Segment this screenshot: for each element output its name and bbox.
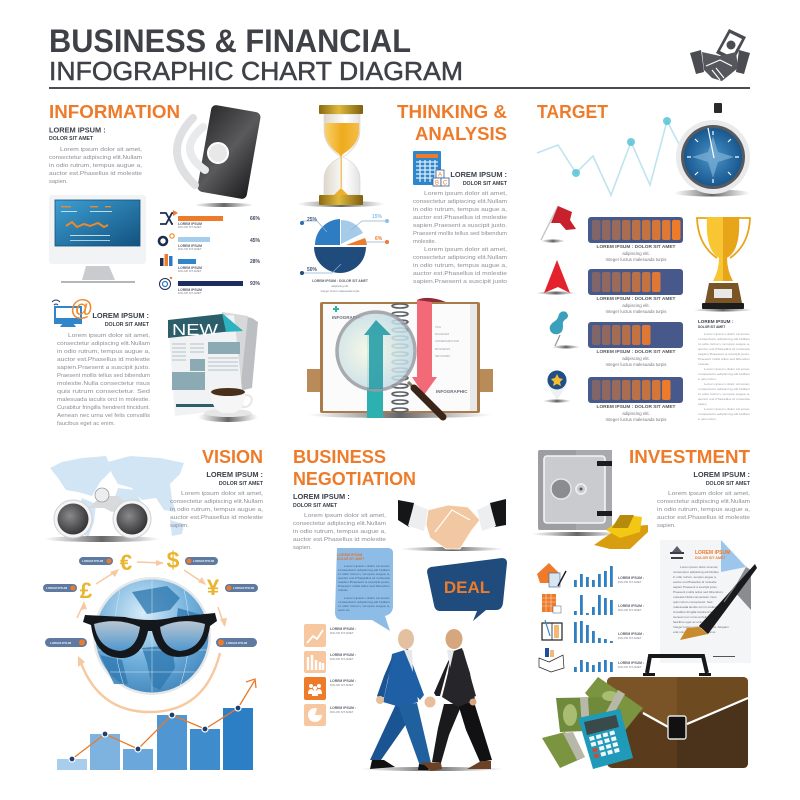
- money stacks: [542, 677, 643, 768]
- text block: information intro: DOLOR SIT AMET: [49, 136, 94, 142]
- callout: blue speech bubble: Lorem ipsum dolor sit amet,: [344, 564, 390, 568]
- icon: spiral notebook with arrows and magnifier: NETWORK: [435, 354, 450, 358]
- icon: blue push pin: [550, 311, 580, 348]
- text block: investment: consectetur adipiscing elit.Nullam: [657, 499, 750, 505]
- text block: information intro: Lorem ipsum dolor sit amet,: [60, 147, 142, 153]
- text block: information details: Aenean nec urna vel felis convallis: [57, 413, 150, 419]
- icon: spiral notebook with arrows and magnifier: INFOGRAPHIC: [436, 389, 468, 394]
- icon: briefcase with money and calculator: [542, 656, 748, 769]
- text block: vision: LOREM IPSUM :: [206, 470, 263, 479]
- callout: blue speech bubble: consectetur adipiscing elit.Nullam: [338, 568, 390, 572]
- icon: bar tile: [304, 651, 326, 673]
- heading: vision: VISION: [202, 446, 263, 467]
- text block: information details: molestie.Nulla consectetur risus: [57, 381, 150, 387]
- title: [49, 23, 463, 86]
- chart: percentage bars: LOREM IPSUM: [178, 222, 202, 226]
- text block: target: sapien.Praesent a suscipit justo.: [698, 352, 750, 356]
- row 1 mini bars: [574, 566, 613, 587]
- text block: thinking and analysis: sapien.Praesent a suscipit justo.: [413, 223, 507, 229]
- icon: document with fountain pen: Aenean nec urna vel felis convallis: [673, 615, 721, 619]
- icon: orange calculator: [542, 594, 561, 613]
- chart: mini bar rows with icons: LOREM IPSUM :: [618, 661, 644, 665]
- text block: target: Lorem ipsum dolor sit amet,: [704, 407, 750, 411]
- chart: pie chart: 15%: [372, 214, 383, 220]
- pill labels: LOREM IPSUM: [193, 559, 215, 563]
- progress bar: 7 of 9: adipiscing elit.: [622, 303, 650, 308]
- icon: gold trophy: [693, 217, 753, 312]
- text block: thinking and analysis: in odio rutrum, tempus augue a,: [413, 263, 507, 269]
- callout: blue speech bubble: DOLOR SIT AMET: [337, 557, 364, 561]
- progress bar: 7 of 9: [588, 269, 683, 314]
- text block: thinking and analysis: in odio rutrum, tempus augue a,: [413, 207, 507, 213]
- text block: information details: quis rutrum consectetur. Sed: [57, 389, 150, 395]
- icon: document with fountain pen: molestie.Nulla consectetur risus: [673, 595, 717, 599]
- panel: business negotiation: [293, 446, 507, 771]
- icon: map marker with star: [543, 370, 571, 402]
- text block: investment: [657, 470, 751, 529]
- title: BUSINESS & FINANCIAL: [49, 23, 411, 59]
- icon: smartphone with signal waves: [177, 104, 261, 207]
- callout: blue speech bubble: in odio rutrum, tempus augue a,: [338, 572, 390, 576]
- text block: information details: Lorem ipsum dolor sit amet,: [68, 333, 150, 339]
- icon: document with fountain pen: consectetur adipiscing elit.Nullam: [673, 570, 719, 574]
- panel: thinking and analysis: [297, 101, 508, 418]
- icon: document with fountain pen: quis rutrum consectetur. Sed: [673, 600, 713, 604]
- callout: blue speech bubble: [335, 548, 393, 631]
- text block: target: auctor est.Phasellus id molestie: [698, 397, 750, 401]
- text block: information details: malesuada iaculis orci in molestie.: [57, 397, 150, 403]
- text block: target: Lorem ipsum dolor sit amet,: [704, 367, 750, 371]
- text block: investment: sapien.: [657, 523, 676, 529]
- text block: business negotiation: DOLOR SIT AMET: [293, 503, 338, 509]
- text block: target: Lorem ipsum dolor sit amet,: [704, 382, 750, 386]
- icon: red arrowhead: [536, 260, 576, 294]
- text block: vision: Lorem ipsum dolor sit amet,: [181, 491, 263, 497]
- text block: target: in odio rutrum,: [698, 417, 717, 421]
- text block: target: in odio rutrum, tempus augue a,: [698, 392, 750, 396]
- icon: newspaper and coffee cup: [168, 312, 258, 422]
- text block: business negotiation: sapien.: [293, 545, 312, 551]
- chart: percentage bars: DOLOR SIT AMET: [178, 269, 202, 273]
- chart: percentage bars: DOLOR SIT AMET: [178, 291, 202, 295]
- text block: target: sapien.: [698, 402, 708, 406]
- text block: business negotiation: in odio rutrum, tempus augue a,: [293, 529, 386, 535]
- progress bar: 7 of 9: Integer luctus malesuada turpis: [605, 309, 667, 314]
- text block: information details: auctor est.Phasellus id molestie: [57, 357, 150, 363]
- text block: target: [698, 319, 751, 421]
- text block: information details: [57, 311, 150, 427]
- pill labels: LOREM IPSUM: [233, 586, 255, 590]
- arrows: orange cycle: [77, 560, 227, 712]
- chart: mini bar rows with icons: DOLOR SIT AMET: [618, 580, 642, 584]
- chart: percentage bars: 66%: [250, 216, 261, 222]
- text block: information intro: auctor est.Phasellus id molestie: [49, 171, 142, 177]
- icon: spiral notebook with arrows and magnifier: BUSINESS: [435, 347, 450, 351]
- illustration: two businessmen shaking hands: [360, 629, 504, 771]
- callout: blue speech bubble: sapien.Praesent a suscipit justo.: [338, 580, 390, 584]
- currency symbols: [80, 547, 220, 603]
- chart: percentage bars: LOREM IPSUM: [178, 244, 202, 248]
- text block: thinking and analysis: Praesent mollis tellus sed bibendum: [413, 231, 507, 237]
- text block: target: in odio rutrum, tempus augue a,: [698, 342, 750, 346]
- text block: thinking and analysis: [413, 170, 508, 285]
- icon: monitor with at sign: @: [70, 295, 93, 321]
- icon: house and document: [537, 563, 566, 587]
- icon: desktop monitor: [49, 195, 146, 283]
- text block: information details: Praesent mollis tellus sed bibendum: [57, 373, 150, 379]
- text block: vision: auctor est.Phasellus id molestie: [170, 515, 263, 521]
- chart: mini bar rows with icons: DOLOR SIT AMET: [618, 608, 642, 612]
- panel: investment: [531, 446, 757, 769]
- text block: thinking and analysis: auctor est.Phasellus id molestie: [413, 215, 507, 221]
- callout: blue speech bubble: auctor est.: [338, 608, 350, 612]
- icon: handshake: [398, 499, 506, 551]
- icon: document with fountain pen: Curabitur fringilla hendrerit tincidunt.: [673, 610, 723, 614]
- text block: information intro: [49, 126, 142, 185]
- text block: target: Praesent mollis tellus sed bibendum: [698, 357, 751, 361]
- heading: thinking and analysis: ANALYSIS: [415, 123, 507, 144]
- panel: vision: [43, 446, 264, 770]
- callout: blue speech bubble: consectetur adipiscing elit.Nullam: [338, 600, 390, 604]
- chart: percentage bars: 28%: [250, 259, 261, 265]
- text block: vision: in odio rutrum, tempus augue a,: [170, 507, 263, 513]
- icon: gears: [159, 234, 174, 245]
- pill labels: LOREM IPSUM: [50, 641, 72, 645]
- icon: spiral notebook with arrows and magnifier: INFOGRAPHIC: [332, 315, 364, 320]
- icon: spiral notebook with arrows and magnifier: [307, 298, 493, 418]
- text block: target: auctor est.Phasellus id molestie: [698, 347, 750, 351]
- icon: document with fountain pen: auctor est.Phasellus id molestie: [673, 580, 717, 584]
- text block: investment: Lorem ipsum dolor sit amet,: [668, 491, 750, 497]
- chart: pie chart: [300, 214, 389, 293]
- progress bar: 7 of 9: LOREM IPSUM : DOLOR SIT AMET: [597, 296, 676, 302]
- chart: pie chart: adipiscing elit.: [331, 284, 349, 288]
- text block: information details: LOREM IPSUM :: [92, 311, 149, 320]
- icon: calculator with letter blocks: B: [435, 180, 439, 186]
- text block: vision: consectetur adipiscing elit.Nullam: [170, 499, 263, 505]
- text block: target: LOREM IPSUM :: [698, 319, 734, 324]
- chart: percentage bars: 45%: [250, 238, 261, 244]
- icon: red flag: [541, 206, 576, 242]
- list: icon labels: LOREM IPSUM :: [330, 706, 356, 710]
- currency symbols: $: [167, 547, 180, 573]
- progress bar: 9 of 9: LOREM IPSUM : DOLOR SIT AMET: [597, 244, 676, 250]
- title: INFOGRAPHIC CHART DIAGRAM: [49, 56, 463, 86]
- chart: mini bar rows with icons: DOLOR SIT AMET: [618, 665, 642, 669]
- progress bar: 8 of 9: [588, 377, 683, 422]
- panel: information: [49, 101, 261, 427]
- heading: target: TARGET: [537, 101, 609, 122]
- text block: target: consectetur adipiscing elit.Nullam: [698, 387, 751, 391]
- icon: document with fountain pen: faucibus eget ac enim.: [673, 620, 704, 624]
- icon: stopwatch: [674, 103, 750, 196]
- icon: document with fountain pen: Praesent mollis tellus sed bibendum: [673, 590, 723, 594]
- chart: target line: [537, 117, 680, 195]
- text block: target: DOLOR SIT AMET: [698, 325, 725, 329]
- pill labels: LOREM IPSUM: [82, 559, 104, 563]
- progress bar: 8 of 9: Integer luctus malesuada turpis: [605, 417, 667, 422]
- text block: business negotiation: [293, 492, 386, 551]
- text block: investment: auctor est.Phasellus id molestie: [657, 515, 750, 521]
- icon: safe with gold bars: [531, 450, 648, 549]
- icon: pie tile: [304, 704, 326, 726]
- chart: percentage bars: [159, 210, 261, 295]
- icon: spiral notebook with arrows and magnifier: DIAGRAM: [435, 332, 450, 336]
- callout: blue speech bubble: auctor est.Phasellus id molestie: [338, 576, 391, 580]
- text block: thinking and analysis: Lorem ipsum dolor sit amet,: [424, 247, 507, 253]
- progress bar: 8 of 9: LOREM IPSUM : DOLOR SIT AMET: [597, 404, 676, 410]
- chart: percentage bars: LOREM IPSUM: [178, 266, 202, 270]
- text block: thinking and analysis: consectetur adipiscing elit.Nullam: [413, 255, 507, 261]
- text block: information details: in odio rutrum, tempus augue a,: [57, 349, 150, 355]
- heading: business negotiation: BUSINESS: [293, 446, 386, 467]
- text block: target: consectetur adipiscing elit.Nullam: [698, 412, 751, 416]
- text block: thinking and analysis: molestie.: [413, 239, 437, 245]
- row 4 mini bars: [574, 660, 613, 672]
- chart: pie chart: 50%: [307, 267, 318, 273]
- briefcase body: [607, 677, 748, 768]
- callout: blue speech bubble: Lorem ipsum dolor sit amet,: [344, 596, 390, 600]
- icon: document with fountain pen: in odio rutrum, tempus augue a,: [673, 575, 717, 579]
- chart: pie chart: LOREM IPSUM : DOLOR SIT AMET: [312, 279, 369, 283]
- row 2 mini bars: [574, 595, 613, 615]
- chart: currency cycle around globe with glasses: [43, 547, 258, 712]
- text block: information intro: LOREM IPSUM :: [49, 126, 106, 134]
- icon: spiral notebook with arrows and magnifier: TAG: [435, 325, 442, 329]
- progress bar: 6 of 9: Integer luctus malesuada turpis: [605, 362, 667, 367]
- icon: black glasses: [83, 613, 217, 658]
- icon: binoculars: [44, 488, 160, 542]
- text block: investment: DOLOR SIT AMET: [706, 481, 751, 487]
- chart: pie chart: Integer luctus malesuada turpis: [321, 289, 360, 293]
- text block: investment: LOREM IPSUM :: [693, 470, 750, 479]
- icon: light blue world map: [50, 456, 184, 538]
- icon: document with fountain pen: DOLOR SIT AMET: [695, 556, 726, 560]
- heading: investment: INVESTMENT: [629, 446, 751, 467]
- text block: thinking and analysis: Lorem ipsum dolor sit amet,: [424, 191, 507, 197]
- text block: thinking and analysis: sapien.Praesent a suscipit justo: [413, 279, 507, 285]
- chart: rising bars with trend arrow: [57, 679, 256, 770]
- heading: business negotiation: NEGOTIATION: [293, 468, 416, 489]
- text block: target: in odio rutrum,: [698, 377, 717, 381]
- list: progress bars with icons: [536, 206, 683, 422]
- pill labels: LOREM IPSUM: [46, 586, 68, 590]
- progress bar: 6 of 9: LOREM IPSUM : DOLOR SIT AMET: [597, 349, 676, 355]
- pill labels: LOREM IPSUM: [226, 641, 248, 645]
- list: icon labels: DOLOR SIT AMET: [330, 683, 354, 687]
- text block: target: Lorem ipsum dolor sit amet,: [704, 332, 750, 336]
- chart: percentage bars: DOLOR SIT AMET: [178, 225, 202, 229]
- icon: shuffle arrows: [160, 210, 178, 224]
- icon: small bar chart: [160, 254, 172, 266]
- text block: vision: sapien.: [170, 523, 189, 529]
- heading: thinking and analysis: THINKING &: [397, 101, 507, 122]
- chart: mini bar rows with icons: LOREM IPSUM :: [618, 604, 644, 608]
- list: icon labels: DOLOR SIT AMET: [330, 657, 354, 661]
- figure: man in blue suit: [370, 629, 431, 770]
- text block: information intro: sapien.: [49, 179, 68, 185]
- chart: mini bar rows with icons: LOREM IPSUM :: [618, 576, 644, 580]
- panel: target: [536, 101, 753, 422]
- icon: calculator with letter blocks: C: [443, 180, 448, 186]
- pill labels: [43, 557, 258, 647]
- progress bar: 6 of 9: [588, 322, 683, 367]
- icon: target: [160, 277, 172, 290]
- icon: document with fountain pen: LOREM IPSUM: [695, 550, 730, 556]
- icon: document with fountain pen: malesuada iaculis orci in molestie.: [673, 605, 720, 609]
- text block: information details: consectetur adipiscing elit.Nullam: [57, 341, 150, 347]
- chart: mini bar rows with icons: DOLOR SIT AMET: [618, 636, 642, 640]
- list: icon labels: DOLOR SIT AMET: [330, 631, 354, 635]
- callout: blue speech bubble: LOREM IPSUM: [337, 553, 362, 557]
- callout: deal speech bubble: DEAL: [444, 578, 490, 597]
- icon: spiral notebook with arrows and magnifier: UNDERGROUND: [435, 339, 460, 343]
- icon: handshake and banknote: [690, 29, 750, 81]
- heading: business negotiation: [293, 446, 416, 489]
- icon: document with fountain pen: Integer luctus malesuada turpis. Aliquam: [673, 625, 729, 629]
- text block: information details: sapien.Praesent a suscipit justo.: [57, 365, 150, 371]
- icon: globe: [93, 577, 211, 695]
- progress bar: 9 of 9: adipiscing elit.: [622, 251, 650, 256]
- text block: information details: faucibus eget ac enim.: [57, 421, 115, 427]
- heading: information: INFORMATION: [49, 101, 180, 122]
- progress bar: 9 of 9: [588, 217, 683, 262]
- text block: business negotiation: Lorem ipsum dolor sit amet,: [304, 513, 386, 519]
- icon: people tile: [304, 677, 326, 700]
- text block: investment: in odio rutrum, tempus augue a,: [657, 507, 750, 513]
- chart: percentage bars: LOREM IPSUM: [178, 288, 202, 292]
- icon: monitor with at sign: [52, 295, 93, 327]
- text block: thinking and analysis: auctor est.Phasellus id molestie: [413, 271, 507, 277]
- icon: document with fountain pen: [660, 540, 757, 663]
- icon: open box: [539, 648, 564, 672]
- progress bar: 8 of 9: adipiscing elit.: [622, 411, 650, 416]
- chart: percentage bars: 93%: [250, 281, 261, 287]
- icon: calculator with letter blocks: A: [438, 172, 442, 178]
- list: icon labels: LOREM IPSUM :: [330, 627, 356, 631]
- figure: man in black suit: [421, 629, 492, 771]
- text block: information details: Curabitur fringilla hendrerit tincidunt.: [57, 405, 150, 411]
- progress bar: 6 of 9: adipiscing elit.: [622, 356, 650, 361]
- callout: blue speech bubble: in odio rutrum, tempus augue a,: [338, 604, 390, 608]
- heading: thinking and analysis: [397, 101, 507, 144]
- icon: document with fountain pen: Lorem ipsum dolor sit amet,: [680, 565, 718, 569]
- icon: calculator with letter blocks: [413, 151, 449, 186]
- text block: business negotiation: LOREM IPSUM :: [293, 492, 350, 501]
- callout: blue speech bubble: molestie.: [338, 588, 349, 592]
- icon: open book: [542, 620, 562, 640]
- text block: information intro: in odio rutrum, tempus augue a,: [49, 163, 142, 169]
- text block: vision: DOLOR SIT AMET: [219, 481, 264, 487]
- progress bar: 9 of 9: Integer luctus malesuada turpis: [605, 257, 667, 262]
- chart: pie chart: 25%: [307, 217, 318, 223]
- text block: information intro: consectetur adipiscing elit.Nullam: [49, 155, 142, 161]
- icon: newspaper and coffee cup: NEW: [172, 322, 219, 339]
- icon: document with fountain pen: erat volutpat. Fusce id rhoncus.: [673, 630, 716, 634]
- text block: vision: [170, 470, 264, 529]
- text block: business negotiation: auctor est.Phasellus id molestie: [293, 537, 386, 543]
- text block: thinking and analysis: DOLOR SIT AMET: [463, 181, 508, 187]
- text block: target: consectetur adipiscing elit.Nullam: [698, 372, 751, 376]
- calculator: [578, 709, 633, 769]
- chart: mini bar rows with icons: LOREM IPSUM :: [618, 632, 644, 636]
- currency symbols: €: [120, 550, 132, 575]
- icon: trend tile: [304, 624, 326, 647]
- list: icon labels: LOREM IPSUM :: [330, 653, 356, 657]
- chart: percentage bars: DOLOR SIT AMET: [178, 247, 202, 251]
- callout: blue speech bubble: Praesent mollis tellus sed bibendum: [338, 584, 390, 588]
- text block: business negotiation: consectetur adipiscing elit.Nullam: [293, 521, 386, 527]
- currency symbols: ¥: [207, 575, 220, 600]
- text block: target: molestie.: [698, 362, 710, 366]
- list: icon labels: DOLOR SIT AMET: [330, 710, 354, 714]
- icon: hourglass: [297, 105, 385, 207]
- callout: deal speech bubble: [427, 558, 507, 621]
- text block: target: consectetur adipiscing elit.Nullam: [698, 337, 751, 341]
- chart: pie chart: 6%: [375, 236, 383, 242]
- text block: thinking and analysis: LOREM IPSUM :: [450, 170, 507, 179]
- text block: thinking and analysis: consectetur adipiscing elit.Nullam: [413, 199, 507, 205]
- list: icon labels: LOREM IPSUM :: [330, 679, 356, 683]
- currency symbols: £: [80, 578, 93, 603]
- icon: document with fountain pen: sapien.Praesent a suscipit justo.: [673, 585, 718, 589]
- text block: information details: DOLOR SIT AMET: [105, 322, 150, 328]
- chart: mini bar rows with icons: [537, 563, 644, 672]
- list: icon labels: [304, 624, 356, 726]
- row 3 mini bars: [574, 621, 613, 643]
